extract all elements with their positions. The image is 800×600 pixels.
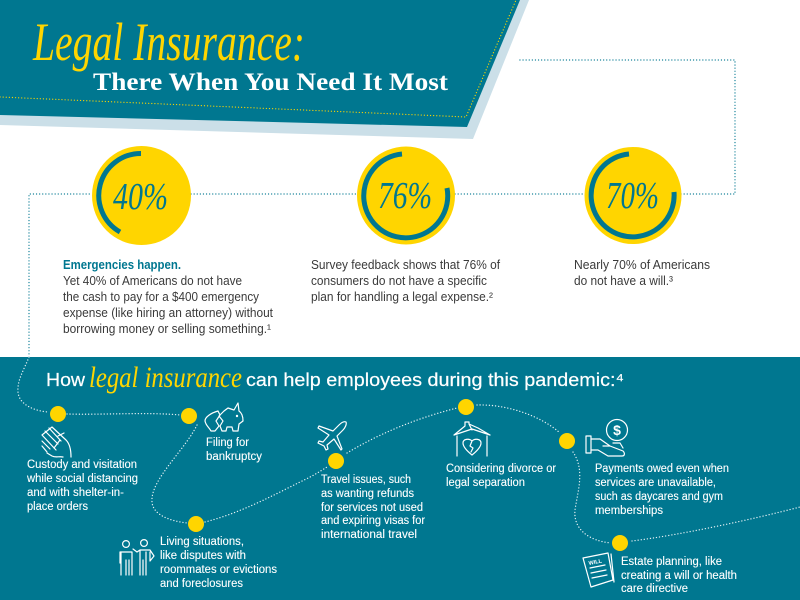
text: emergencies: borrowing money or selling something.¹ — [63, 322, 271, 336]
text: emergencies: Emergencies happen. — [63, 258, 181, 272]
text: estate: Estate planning, like — [621, 556, 722, 568]
band heading — [46, 361, 624, 394]
icon: two people — [120, 540, 154, 575]
bottom teal band — [0, 357, 800, 600]
text: will: Nearly 70% of Americans — [574, 258, 710, 272]
text: estate — [621, 556, 737, 595]
text: living situations: and foreclosures — [160, 578, 243, 590]
banner dotted border — [0, 0, 516, 117]
text: estate: creating a will or health — [621, 570, 737, 582]
text: bankruptcy: Filing for — [206, 437, 249, 449]
icon: hand with dollar coin: $ — [613, 422, 621, 438]
text: living situations: like disputes with — [160, 550, 246, 562]
text: payments: services are unavailable, — [595, 477, 716, 489]
text: living situations: roommates or evictions — [160, 564, 277, 576]
text: divorce: Considering divorce or — [446, 463, 556, 475]
text: divorce — [446, 463, 556, 489]
text: payments — [595, 463, 729, 517]
text: travel: Travel issues, such — [321, 474, 411, 486]
stat: 76%: 76% — [378, 175, 432, 217]
band heading: legal insurance — [89, 361, 242, 394]
text: will — [574, 258, 710, 288]
icon: hand with dollar coin — [586, 420, 628, 456]
icon: will document: WILL — [588, 558, 603, 567]
text: travel: for services not used — [321, 502, 423, 514]
text: estate: care directive — [621, 583, 688, 595]
text: custody: place orders — [27, 501, 88, 513]
text: emergencies: Yet 40% of Americans do not have — [63, 274, 242, 288]
stat: 40% — [92, 146, 191, 245]
text: custody — [26, 459, 138, 513]
icon: house with broken heart — [454, 422, 490, 456]
text: travel — [321, 474, 425, 541]
text: survey: Survey feedback shows that 76% of — [311, 258, 500, 272]
subtitle: There When You Need It Most — [93, 69, 449, 96]
text: survey: consumers do not have a specific — [311, 274, 487, 288]
stat: 76% — [357, 146, 455, 244]
text: divorce: legal separation — [446, 477, 525, 489]
text: survey: plan for handling a legal expense.² — [311, 290, 493, 304]
band heading: can help employees during this pandemic:⁴ — [246, 370, 624, 390]
band heading: How — [46, 370, 86, 390]
timeline dots — [50, 399, 628, 551]
text: will: do not have a will.³ — [574, 274, 673, 288]
stat: 70%: 70% — [606, 175, 659, 217]
text: bankruptcy — [206, 437, 262, 463]
text: custody: and with shelter-in- — [27, 487, 124, 499]
text: survey — [311, 258, 500, 304]
text: emergencies — [63, 258, 273, 336]
stat: 40%: 40% — [113, 176, 168, 218]
text: payments: memberships — [595, 505, 663, 517]
icon: plane — [318, 422, 346, 450]
icon: will document — [583, 553, 614, 587]
text: payments: Payments owed even when — [595, 463, 729, 475]
text: travel: international travel — [321, 529, 417, 541]
text: living situations — [160, 536, 277, 590]
text: emergencies: expense (like hiring an attorney) without — [63, 306, 273, 320]
title banner — [0, 0, 520, 127]
title: Legal Insurance: Legal Insurance: — [32, 12, 305, 72]
text: living situations: Living situations, — [160, 536, 244, 548]
text: payments: such as daycares and gym — [595, 491, 723, 503]
dotted timeline path — [18, 357, 800, 543]
text: travel: as wanting refunds — [321, 488, 414, 500]
dotted connector: stats — [29, 60, 735, 357]
text: custody: Custody and visitation — [27, 459, 137, 471]
stat: 70% — [584, 147, 682, 244]
icon: hands — [42, 427, 71, 457]
text: bankruptcy: bankruptcy — [206, 451, 262, 463]
banner shadow — [0, 0, 529, 139]
text: emergencies: the cash to pay for a $400 emergency — [63, 290, 260, 304]
text: travel: and expiring visas for — [321, 515, 425, 527]
text: custody: while social distancing — [26, 473, 138, 485]
icon: broken piggy bank — [205, 403, 243, 431]
